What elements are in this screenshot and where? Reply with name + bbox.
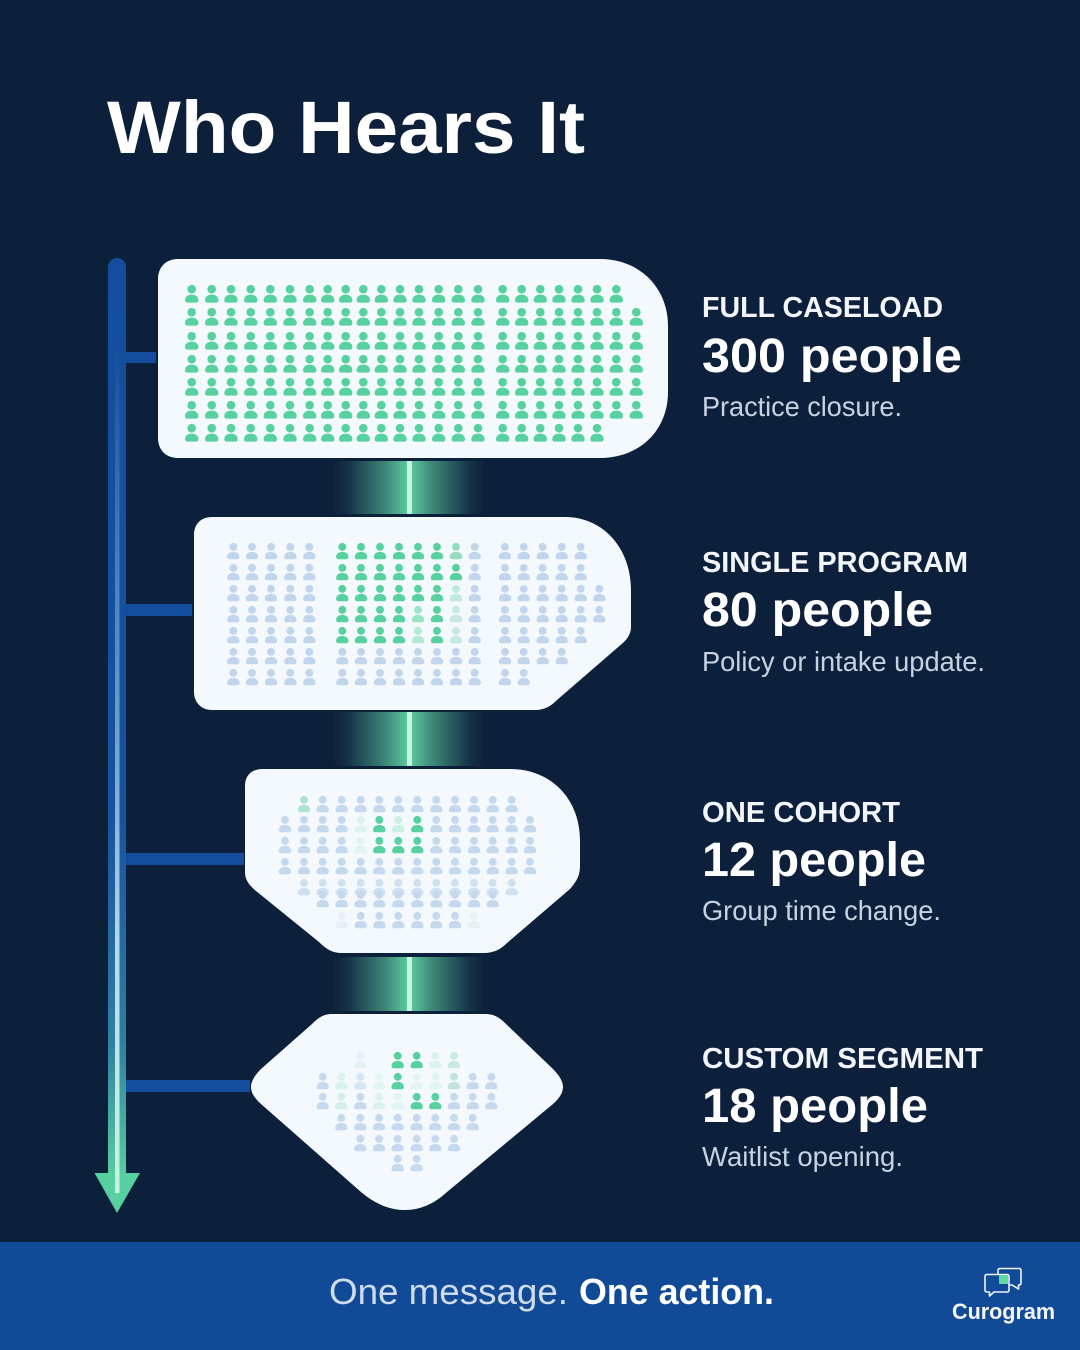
label: custom segment: 18 people — [702, 1080, 928, 1133]
label: full caseload — [702, 292, 962, 422]
timeline arrow — [94, 258, 140, 1213]
panel: one cohort — [245, 769, 580, 953]
footer band — [0, 1242, 1080, 1350]
people grid: 12 — [279, 796, 536, 928]
label: one cohort: ONE COHORT — [702, 797, 900, 829]
icon: chat bubbles — [985, 1268, 1021, 1296]
title: Who Hears It — [107, 86, 585, 169]
label: full caseload: Practice closure. — [702, 391, 902, 422]
people grid: 18 — [317, 1052, 497, 1171]
logo: Curogram — [952, 1268, 1055, 1324]
connector glow 1 — [333, 461, 485, 514]
label: custom segment — [702, 1043, 983, 1172]
label: single program: SINGLE PROGRAM — [702, 547, 968, 579]
label: one cohort — [702, 797, 941, 926]
footer message: One action. — [579, 1271, 774, 1312]
connector glow 2 — [333, 712, 485, 766]
branch: custom segment — [126, 1080, 250, 1092]
label: one cohort: 12 people — [702, 834, 926, 887]
label: full caseload: 300 people — [702, 330, 962, 383]
connector glow 3 — [333, 957, 485, 1011]
panel: full caseload — [158, 259, 668, 458]
branch: full caseload — [126, 352, 156, 363]
label: custom segment: CUSTOM SEGMENT — [702, 1043, 983, 1075]
footer message — [329, 1271, 774, 1312]
people grid: 300 — [185, 285, 643, 442]
footer message: One message. — [329, 1271, 568, 1312]
label: single program: 80 people — [702, 584, 933, 637]
panel: single program — [194, 517, 631, 710]
label: one cohort: Group time change. — [702, 895, 941, 926]
wordmark: Curogram — [952, 1299, 1055, 1324]
branch: single program — [126, 604, 192, 616]
label: single program: Policy or intake update. — [702, 646, 985, 677]
branch: one cohort — [126, 853, 244, 865]
label: single program — [702, 547, 985, 677]
label: full caseload: FULL CASELOAD — [702, 292, 943, 324]
people grid: 80 — [227, 543, 605, 685]
label: custom segment: Waitlist opening. — [702, 1141, 903, 1172]
panel: custom segment — [251, 1014, 563, 1210]
